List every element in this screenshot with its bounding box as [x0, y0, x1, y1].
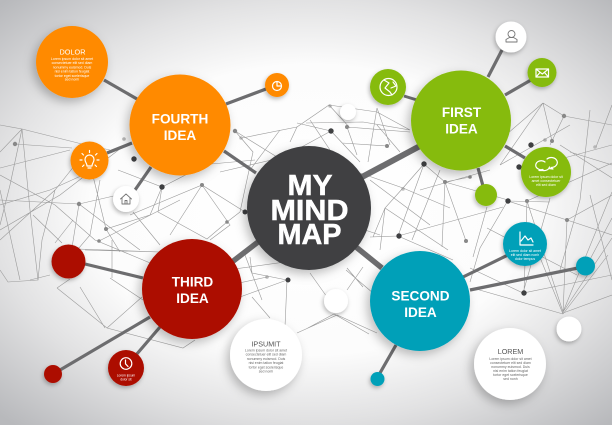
node: dolor: consectetuer elit sed diam — [52, 61, 92, 65]
heading node: first idea — [411, 70, 511, 170]
white accent circles — [324, 104, 582, 342]
node: ipsumit: nisi enim tation feugiat — [249, 361, 283, 365]
accent: green dot — [475, 184, 497, 206]
node: ipsumit: nonummy euismod. Duis — [247, 357, 286, 361]
accent: teal dot — [576, 256, 595, 276]
heading node: first idea: FIRST — [442, 105, 482, 120]
node: lorem: nonummy euismod. Duis — [491, 365, 530, 369]
icon: mail — [528, 58, 556, 87]
node: lorem: Lorem ipsum dolor sit amet — [489, 357, 532, 361]
heading node: first idea: IDEA — [445, 121, 478, 136]
node: dolor: sed nonh — [65, 78, 79, 82]
node: dolor — [36, 26, 108, 98]
node: chat: amet consectetuer — [532, 179, 561, 183]
node: lorem: consectetuer elit sed diam — [490, 361, 531, 365]
node: dolor: DOLOR — [60, 48, 85, 56]
connectors — [60, 50, 578, 373]
node: chat: elit sed diam — [536, 183, 556, 187]
node: chart: Lorem dolor sit amet — [509, 249, 541, 253]
node: ipsumit: tortor eget scelerisque — [249, 365, 283, 369]
icon: person — [496, 22, 526, 52]
heading node: third idea: IDEA — [176, 291, 209, 306]
node: clock — [108, 350, 144, 386]
node: lorem: LOREM — [498, 347, 523, 356]
center node: my mind map: MIND — [270, 195, 348, 227]
node: chat — [521, 147, 571, 197]
node: dolor: nonummy euismod. Duis — [53, 65, 92, 69]
node: dolor: nisi enim tation feugiat — [55, 70, 89, 74]
accent: red dot — [52, 244, 86, 278]
network mesh — [0, 103, 612, 348]
node: chart: elit sed diam nonh — [511, 253, 539, 257]
icon: light bulb — [70, 142, 108, 180]
heading node: third idea — [142, 239, 242, 339]
heading node: fourth idea: FOURTH — [152, 112, 208, 126]
node: lorem: tortor eget scelerisque — [493, 373, 528, 377]
node: dolor: tortor eget scelerisque — [55, 74, 89, 78]
node: lorem — [474, 328, 546, 400]
node: lorem: sed nonh — [503, 377, 518, 381]
node: ipsumit: consectetuer elit sed diam — [246, 353, 286, 357]
accent: small red dot — [44, 365, 62, 383]
heading node: second idea — [370, 251, 470, 351]
node: ipsumit: sed nonh — [259, 370, 273, 374]
heading node: second idea: SECOND — [391, 288, 450, 303]
center node: my mind map: MY — [288, 170, 332, 202]
heading node: fourth idea: IDEA — [164, 128, 196, 143]
icon: pie chart — [265, 73, 289, 97]
node: ipsumit: IPSUMIT — [251, 339, 281, 348]
node: clock: Lorem ipsum — [117, 374, 136, 378]
accent: small teal dot — [370, 372, 384, 386]
node: chat: Lorem ipsum dolor sit — [529, 175, 563, 179]
center node: my mind map: MAP — [278, 219, 342, 251]
node: clock: dolor sit — [120, 378, 132, 382]
node: chart — [503, 222, 547, 266]
icon: globe — [370, 69, 406, 105]
mesh nodes — [13, 104, 597, 279]
icon: home — [113, 186, 139, 212]
node: lorem: nisi enim tation feugiat — [493, 369, 528, 373]
heading node: second idea: IDEA — [404, 305, 437, 320]
heading node: third idea: THIRD — [172, 274, 213, 290]
heading node: fourth idea — [130, 74, 230, 176]
node: chart: dolor tempus — [515, 257, 535, 261]
center node: my mind map — [247, 146, 371, 270]
node: dolor: Lorem ipsum dolor sit amet — [51, 57, 93, 61]
node: ipsumit: Lorem ipsum dolor sit amet — [245, 348, 287, 352]
node: ipsumit — [230, 319, 302, 391]
